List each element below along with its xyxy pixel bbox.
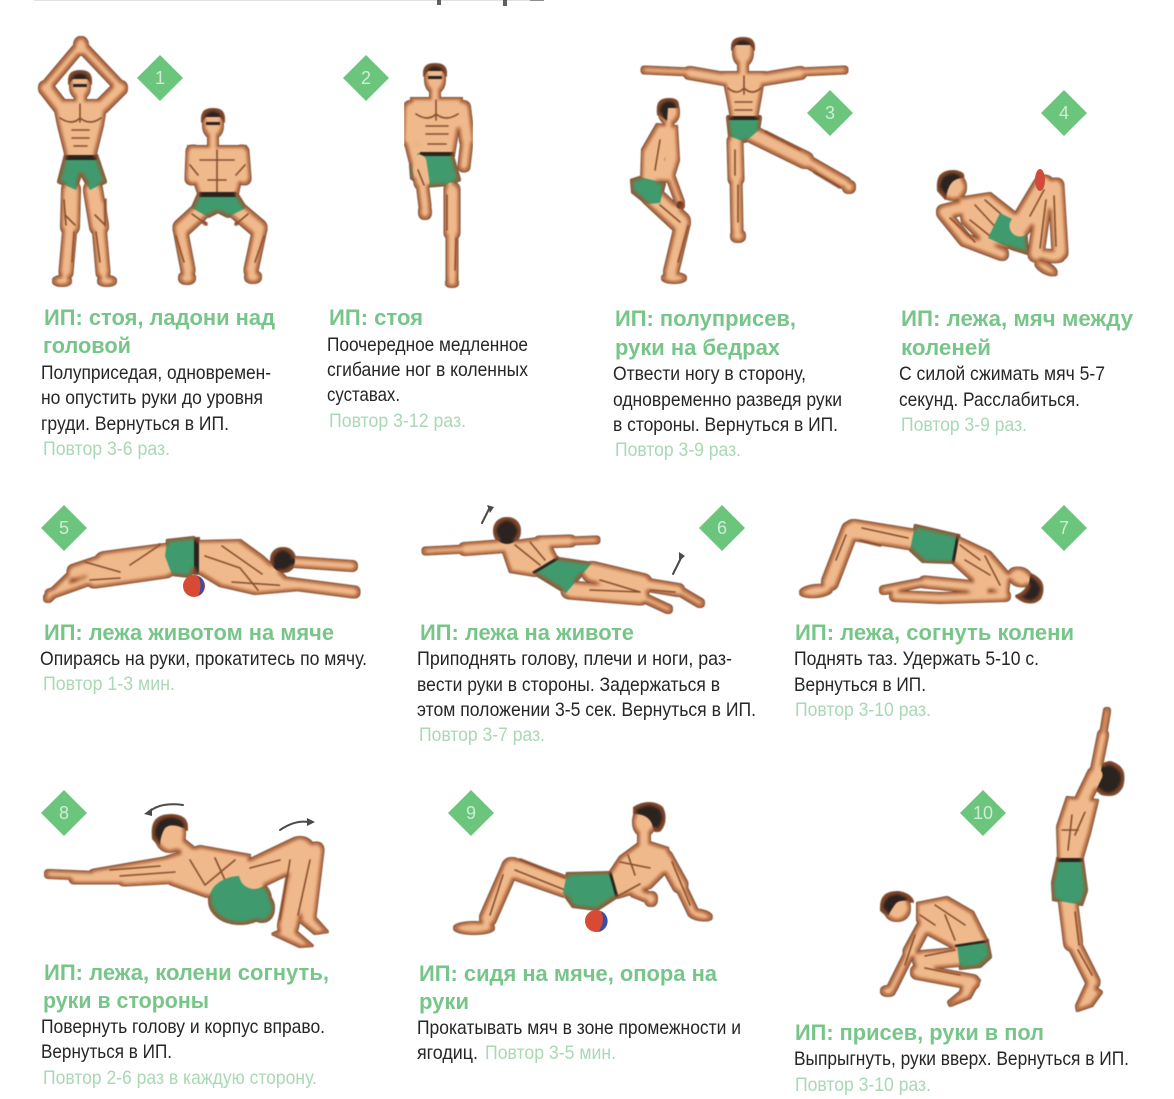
heading: коленей	[901, 335, 991, 360]
description: но опустить руки до уровня	[41, 387, 263, 409]
figure: man lying on stomach, lifting head, chest and legs	[426, 518, 700, 609]
figure: side view half squat	[631, 99, 688, 283]
description: Повернуть голову и корпус вправо.	[41, 1016, 325, 1038]
badge: number 6	[699, 505, 745, 551]
description: одновременно разведя руки	[613, 389, 842, 411]
icon: ball between knees	[1035, 169, 1045, 191]
description: Вернуться в ИП.	[41, 1041, 172, 1063]
description: Вернуться в ИП.	[794, 674, 926, 696]
heading: ИП: лежа, колени согнуть,	[44, 960, 329, 985]
heading: головой	[43, 333, 131, 358]
badge: number 1: 1	[155, 68, 165, 88]
heading: ИП: лежа животом на мяче	[44, 620, 334, 645]
badge: number 6: 6	[717, 518, 727, 538]
description: сгибание ног в коленных	[327, 359, 528, 381]
description: в стороны. Вернуться в ИП.	[613, 414, 838, 436]
badge: number 2	[343, 55, 389, 101]
description: Выпрыгнуть, руки вверх. Вернуться в ИП.	[794, 1048, 1129, 1070]
panel: exercise 2	[327, 55, 528, 432]
description: Полуприседая, одновремен-	[41, 362, 271, 384]
figure: man crouching, hands to floor	[881, 892, 991, 1006]
panel: exercise 8	[41, 790, 329, 1089]
description: Приподнять голову, плечи и ноги, раз-	[417, 648, 732, 670]
panel: exercise 10	[794, 711, 1129, 1096]
arrow: head raising	[482, 505, 494, 523]
description: Поднять таз. Удержать 5-10 с.	[794, 648, 1039, 670]
panel: exercise 6	[417, 505, 756, 746]
badge: number 9: 9	[466, 803, 476, 823]
figure: man jumping, arms up	[1052, 711, 1124, 1011]
description: секунд. Расслабиться.	[899, 389, 1080, 411]
panel: exercise 9	[417, 790, 741, 1064]
panel: exercise 1	[41, 37, 275, 460]
description: Прокатывать мяч в зоне промежности и	[417, 1017, 741, 1039]
description: суставах.	[327, 384, 400, 406]
repeat count: Повтор 3-9 раз.	[901, 415, 1027, 436]
repeat count: Повтор 3-7 раз.	[419, 725, 545, 746]
badge: number 4: 4	[1059, 103, 1069, 123]
description: груди. Вернуться в ИП.	[41, 413, 229, 435]
description: вести руки в стороны. Задержаться в	[417, 674, 720, 696]
icon: red and blue ball	[183, 575, 205, 597]
badge: number 10	[960, 790, 1006, 836]
repeat count: Повтор 3-12 раз.	[329, 411, 466, 432]
icon: red and blue ball	[585, 910, 608, 932]
heading: ИП: стоя, ладони над	[44, 305, 275, 330]
arrow: feet raising	[673, 552, 685, 574]
badge: number 9	[448, 790, 494, 836]
panel: exercise 5	[40, 505, 367, 695]
heading: руки на бедрах	[615, 335, 781, 360]
description: этом положении 3-5 сек. Вернуться в ИП.	[417, 699, 756, 721]
panel: exercise 7	[794, 505, 1087, 721]
badge: number 3: 3	[825, 103, 835, 123]
badge: number 3	[807, 90, 853, 136]
figure: man standing with palms overhead	[45, 37, 121, 286]
figure: man lying, knees bent, arms out, twisting	[49, 815, 328, 947]
repeat count: Повтор 3-10 раз.	[795, 1075, 931, 1096]
description: Опираясь на руки, прокатитесь по мячу.	[40, 648, 367, 670]
badge: number 2: 2	[361, 68, 371, 88]
heading: ИП: лежа, мяч между	[901, 306, 1134, 331]
figure: man with leg swung out and arms spread	[645, 38, 855, 242]
description: С силой сжимать мяч 5-7	[899, 363, 1105, 385]
repeat count: Повтор 3-5 мин.	[485, 1043, 616, 1064]
panel: exercise 3	[613, 38, 855, 461]
badge: number 8: 8	[59, 803, 69, 823]
repeat count: Повтор 3-9 раз.	[615, 440, 741, 461]
badge: number 10: 10	[973, 803, 993, 823]
heading: руки	[419, 989, 469, 1014]
figure: man lifting one knee	[410, 64, 467, 287]
panel: exercise 4	[899, 90, 1134, 436]
badge: number 7	[1041, 505, 1087, 551]
figure: man lying, ball between knees	[938, 171, 1065, 278]
badge: number 7: 7	[1059, 518, 1069, 538]
repeat count: Повтор 3-6 раз.	[43, 439, 170, 460]
description: ягодиц.	[417, 1042, 478, 1064]
arrow: knee turn	[280, 818, 315, 830]
description: Отвести ногу в сторону,	[613, 363, 806, 385]
heading: ИП: стоя	[329, 305, 423, 330]
repeat count: Повтор 2-6 раз в каждую сторону.	[43, 1068, 317, 1089]
cropped title remnant	[34, 0, 544, 6]
figure: man in hip bridge	[799, 525, 1042, 603]
figure: man sitting on ball, leaning on arms	[454, 803, 713, 934]
badge: number 1	[137, 55, 183, 101]
figure: man lying with stomach on ball	[48, 537, 354, 598]
figure: man in half squat	[176, 109, 264, 284]
badge: number 4	[1041, 90, 1087, 136]
badge: number 5: 5	[59, 518, 69, 538]
arrow: head turn	[144, 804, 183, 816]
heading: ИП: полуприсев,	[615, 306, 796, 331]
badge: number 8	[41, 790, 87, 836]
heading: ИП: сидя на мяче, опора на	[419, 961, 718, 986]
heading: ИП: присев, руки в пол	[795, 1020, 1044, 1045]
description: Поочередное медленное	[327, 334, 528, 356]
heading: руки в стороны	[43, 988, 209, 1013]
badge: number 5	[41, 505, 87, 551]
repeat count: Повтор 3-10 раз.	[795, 700, 931, 721]
repeat count: Повтор 1-3 мин.	[43, 674, 175, 695]
heading: ИП: лежа, согнуть колени	[795, 620, 1074, 645]
heading: ИП: лежа на животе	[420, 620, 634, 645]
